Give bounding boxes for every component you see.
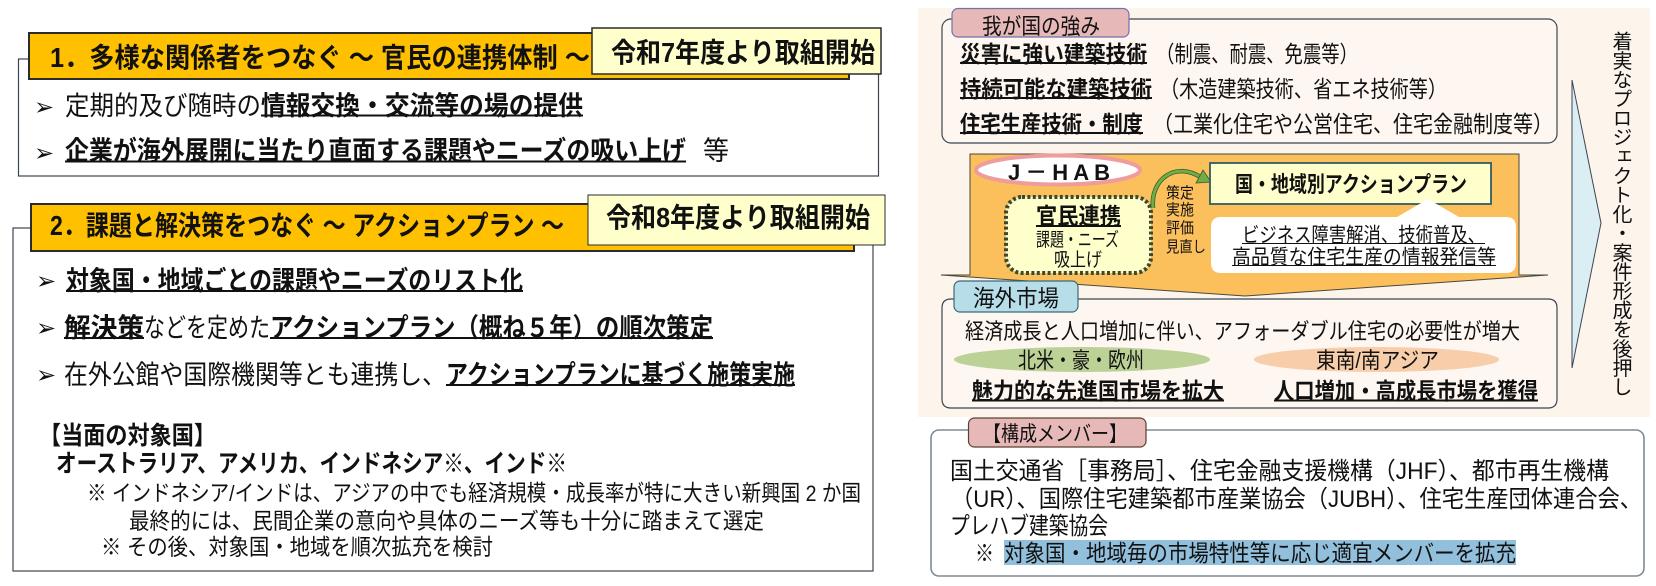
text: market demand: 経済成長と人口増加に伴い、アフォーダブル住宅の必要性が増大 xyxy=(965,319,1520,344)
text: current target countries: 【当面の対象国】 xyxy=(39,422,216,450)
bullet: list of issues: ➢ xyxy=(36,267,56,295)
box: public-private partnership: 官民連携 xyxy=(1036,203,1121,229)
text: member list: プレハブ建築協会 xyxy=(950,513,1108,540)
heading: section 1 xyxy=(29,33,849,79)
heading: section 2 xyxy=(31,204,854,251)
bullet: implementation: ➢ xyxy=(36,361,56,389)
strength: sustainable xyxy=(960,76,1447,102)
bullet: action plan formulation: などを定めた xyxy=(144,313,270,343)
box: public-private partnership xyxy=(1006,197,1151,273)
panel: 1 stakeholders xyxy=(18,28,881,176)
strength: sustainable: （木造建築技術、省エネ技術等） xyxy=(1160,76,1447,102)
text: developed markets: 魅力的な先進国市場を拡大 xyxy=(972,378,1224,404)
panel: J-HAB xyxy=(941,154,1548,296)
tab: overseas markets: 海外市場 xyxy=(973,285,1059,311)
text: plan implement evaluate review: 実施 xyxy=(1166,201,1194,219)
text: current target countries: ※ その後、対象国・地域を順次拡充を検討 xyxy=(101,535,493,560)
badge: from Reiwa 7: 令和7年度より取組開始 xyxy=(611,37,875,68)
bullet: issues and needs: 等 xyxy=(703,136,729,166)
strength: disaster resistance: （制震、耐震、免震等） xyxy=(1156,41,1358,67)
ellipse: Southeast and South Asia: 東南/南アジア xyxy=(1316,348,1439,373)
text: current target countries: ※ インドネシア/インドは、アジアの中でも経済規模・成長率が特に大きい新興国 2 か国 xyxy=(87,481,861,506)
tab: overseas markets xyxy=(954,281,1078,312)
ellipse: J-HAB: J－HAB xyxy=(1008,160,1110,185)
text: current target countries: 最終的には、民間企業の意向や具体のニーズ等も十分に踏まえて選定 xyxy=(129,509,764,534)
bullet: information exchange xyxy=(34,91,583,121)
strength: housing production xyxy=(960,111,1553,137)
text: plan implement evaluate review xyxy=(1166,184,1206,256)
bullet: implementation: アクションプランに基づく施策実施 xyxy=(446,360,795,390)
callout: business barriers xyxy=(1211,199,1516,273)
panel: overseas markets xyxy=(942,281,1557,408)
panel: our strengths xyxy=(942,8,1557,143)
tab: our strengths xyxy=(952,8,1129,39)
bullet: issues and needs: 企業が海外展開に当たり直面する課題やニーズの吸い上げ xyxy=(65,136,686,166)
bullet: action plan formulation xyxy=(36,313,713,343)
strength: disaster resistance: 災害に強い建築技術 xyxy=(960,41,1147,67)
background: right panel xyxy=(918,8,1650,417)
heading: section 2: 2．課題と解決策をつなぐ ～ アクションプラン ～ xyxy=(50,210,564,241)
box: public-private partnership: 課題・ニーズ xyxy=(1036,229,1119,251)
panel: 2 action plan xyxy=(13,195,885,571)
bullet: list of issues: 対象国・地域ごとの課題やニーズのリスト化 xyxy=(66,266,523,296)
bullet: action plan formulation: アクションプラン（概ね５年）の順次策定 xyxy=(270,313,713,343)
text: vertical caption: 着実なプロジェクト化・案件形成を後押し xyxy=(1609,31,1632,396)
ellipse: North America, Australia, Europe: 北米・豪・欧州 xyxy=(1018,348,1144,373)
text: plan implement evaluate review: 評価 xyxy=(1166,219,1194,237)
heading: section 1: 1．多様な関係者をつなぐ ～ 官民の連携体制 ～ xyxy=(50,42,590,73)
box: action plan xyxy=(1210,163,1491,204)
tab: members: 【構成メンバー】 xyxy=(983,423,1127,446)
text: plan implement evaluate review: 策定 xyxy=(1166,184,1194,202)
text: plan implement evaluate review: 見直し xyxy=(1166,238,1206,256)
strength: housing production: （工業化住宅や公営住宅、住宅金融制度等） xyxy=(1153,111,1553,137)
text: current target countries: オーストラリア、アメリカ、インドネシア※、インド※ xyxy=(56,450,567,478)
ellipse: J-HAB xyxy=(976,156,1140,185)
text: expansion note: ※ xyxy=(975,540,994,566)
bullet: information exchange: 情報交換・交流等の場の提供 xyxy=(261,91,583,121)
panel: members xyxy=(931,418,1644,576)
bullet: implementation: 在外公館や国際機関等とも連携し、 xyxy=(64,360,446,390)
text: expansion note: 対象国・地域毎の市場特性等に応じ適宜メンバーを拡充 xyxy=(1004,540,1516,566)
ellipse: North America, Australia, Europe xyxy=(954,347,1210,373)
badge: from Reiwa 7 xyxy=(592,28,881,74)
strength: housing production: 住宅生産技術・制度 xyxy=(960,111,1143,137)
bullet: information exchange: ➢ xyxy=(34,93,54,121)
text: member list xyxy=(950,458,1642,540)
strength: sustainable: 持続可能な建築技術 xyxy=(960,76,1152,102)
bullet: implementation xyxy=(36,360,795,390)
text: member list: 国土交通省［事務局］、住宅金融支援機構（JHF）、都市再生機構 xyxy=(950,458,1609,485)
ellipse: Southeast and South Asia xyxy=(1254,347,1499,373)
box: public-private partnership: 吸上げ xyxy=(1054,249,1102,271)
bullet: information exchange: 定期的及び随時の xyxy=(65,91,261,121)
callout: business barriers: ビジネス障害解消、技術普及、 xyxy=(1242,224,1485,247)
tab: our strengths: 我が国の強み xyxy=(982,14,1100,39)
text: growth markets: 人口増加・高成長市場を獲得 xyxy=(1274,378,1538,404)
badge: from Reiwa 8 xyxy=(588,195,885,245)
strength: disaster resistance xyxy=(960,41,1358,67)
bullet: issues and needs: ➢ xyxy=(34,139,54,167)
bullet: action plan formulation: 解決策 xyxy=(64,313,144,343)
arrow: green curve xyxy=(1153,170,1211,208)
bullet: action plan formulation: ➢ xyxy=(36,314,56,342)
badge: from Reiwa 8: 令和8年度より取組開始 xyxy=(606,202,870,233)
text: current target countries xyxy=(39,422,861,560)
callout: business barriers: 高品質な住宅生産の情報発信等 xyxy=(1232,246,1496,269)
arrow: large blue xyxy=(1572,80,1601,368)
box: action plan: 国・地域別アクションプラン xyxy=(1235,172,1467,197)
